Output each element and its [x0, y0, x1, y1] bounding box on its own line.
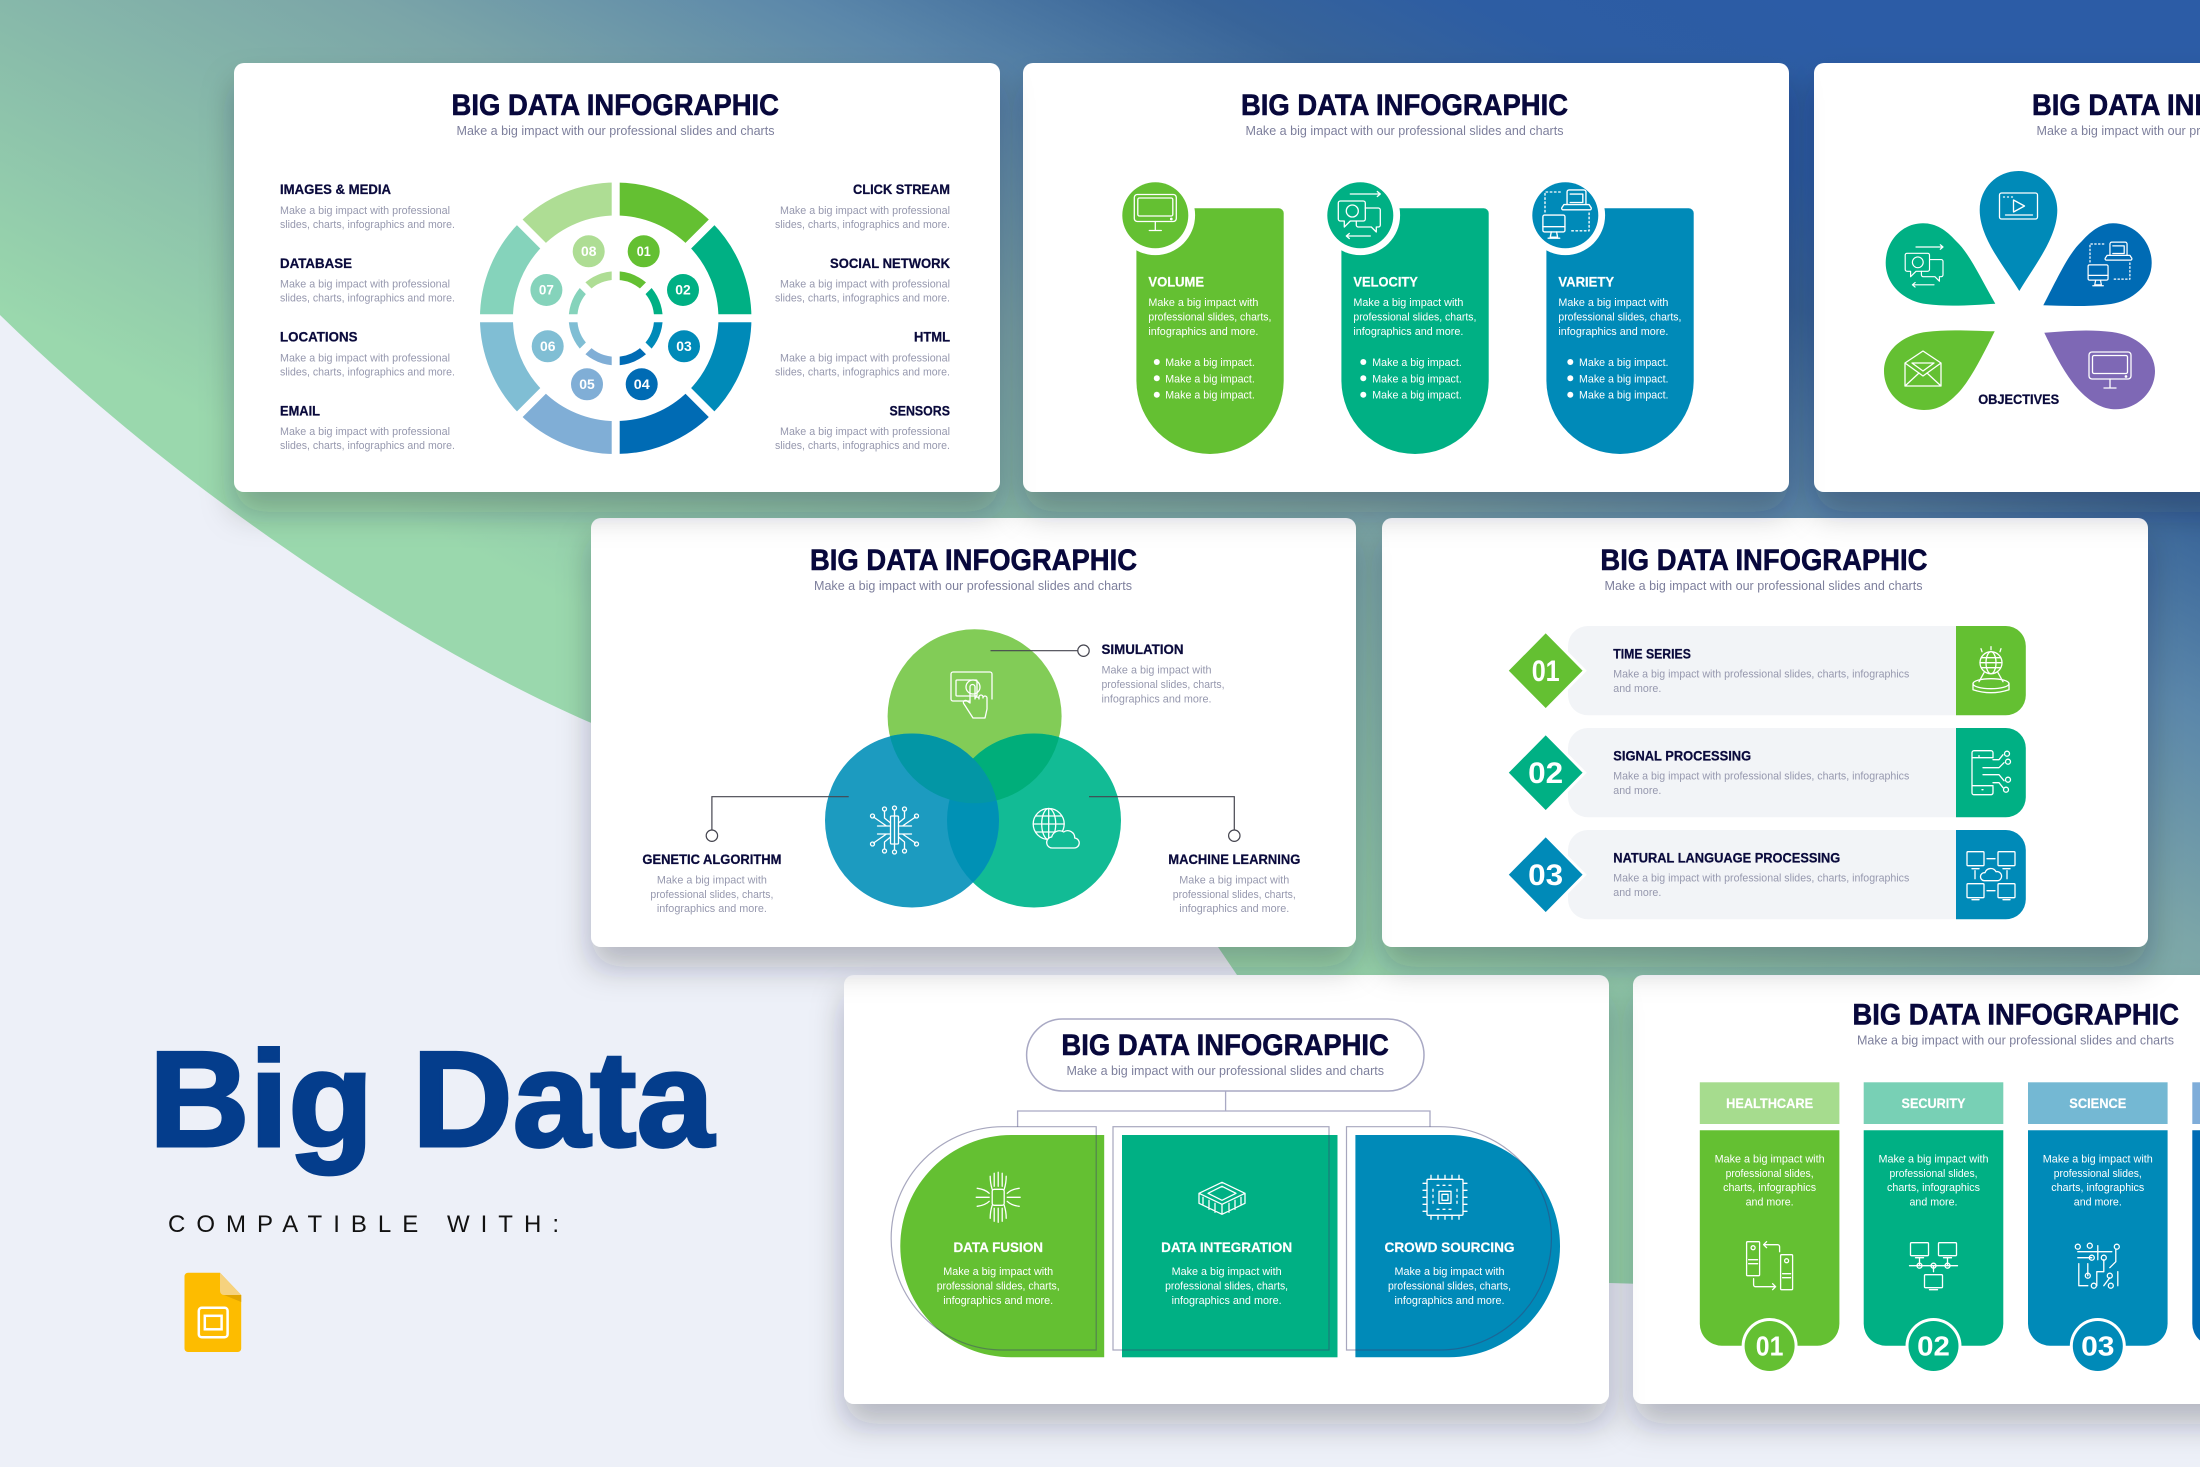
text: simulation: [1102, 642, 1224, 706]
card: velocity: Make a big impact.: [1372, 373, 1462, 385]
text: email: slides, charts, infographics and more.: [280, 440, 455, 452]
text: images and media: [280, 182, 455, 231]
text: machine learning: MACHINE LEARNING: [1168, 852, 1300, 867]
donut chart: 01: [637, 244, 651, 259]
card: velocity: Make a big impact.: [1372, 390, 1462, 402]
row 1 time series: Make a big impact with professional slides, charts, infographics: [1613, 668, 1910, 680]
row 3 natural language processing: 03: [1528, 859, 1563, 892]
text: social network: SOCIAL NETWORK: [830, 256, 950, 271]
column 3 science: charts, infographics: [2051, 1182, 2145, 1194]
donut chart: 04: [634, 377, 650, 392]
column 3 science: 03: [2081, 1331, 2114, 1362]
card: variety: Make a big impact.: [1579, 357, 1668, 369]
heading: BIG DATA INFOGRAPHIC: [452, 89, 779, 122]
text: machine learning: [1168, 852, 1300, 915]
panel: data integration: infographics and more.: [1172, 1295, 1282, 1307]
column 3 science: Make a big impact with: [2043, 1154, 2153, 1166]
column 1 healthcare: Make a big impact with: [1715, 1154, 1825, 1166]
column 1 healthcare: professional slides,: [1726, 1168, 1814, 1180]
text: sensors: SENSORS: [890, 404, 950, 418]
text: click stream: CLICK STREAM: [853, 182, 950, 197]
text: html: Make a big impact with professional: [780, 352, 950, 364]
column 3 science: professional slides,: [2054, 1168, 2142, 1180]
row 1 time series: [1507, 626, 2026, 715]
row 2 signal processing: [1507, 728, 2026, 817]
petal: monitor: [2044, 330, 2155, 409]
donut chart: 06: [540, 339, 556, 354]
text: sensors: Make a big impact with professional: [780, 426, 950, 438]
text: database: Make a big impact with professional: [280, 279, 450, 291]
panel: data integration: [1113, 1127, 1338, 1357]
donut chart: 08: [581, 244, 597, 259]
column 3 science: [2028, 1082, 2168, 1374]
text: genetic algorithm: professional slides, charts,: [650, 889, 773, 901]
slide 1: donut diagram: [234, 63, 1000, 492]
column 1 healthcare: and more.: [1746, 1196, 1794, 1208]
column 2 security: 02: [1917, 1331, 1950, 1362]
text: genetic algorithm: GENETIC ALGORITHM: [642, 852, 781, 867]
label: objectives: OBJECTIVES: [1978, 392, 2059, 407]
line: simulation: [990, 645, 1089, 656]
column 2 security: [1864, 1082, 2003, 1374]
donut chart: 03: [676, 339, 692, 354]
text: database: DATABASE: [280, 256, 352, 271]
petal: devices: [2043, 223, 2152, 306]
row 1 time series: 01: [1532, 655, 1560, 688]
card: volume: Make a big impact with: [1148, 297, 1258, 309]
text: html: HTML: [914, 330, 950, 344]
panel: data fusion: professional slides, charts,: [937, 1280, 1060, 1292]
text: locations: LOCATIONS: [280, 330, 358, 344]
card: volume: Make a big impact.: [1165, 390, 1255, 402]
heading: BIG DATA INFOGRAPHIC: [810, 544, 1137, 577]
icon: touch screen: [951, 672, 992, 718]
text: simulation: Make a big impact with: [1102, 664, 1212, 676]
row 2 signal processing: and more.: [1613, 785, 1661, 797]
text: simulation: professional slides, charts,: [1102, 679, 1224, 691]
icon: genetic algorithm: [870, 806, 918, 854]
panel: data integration: DATA INTEGRATION: [1161, 1239, 1292, 1255]
panel: crowd sourcing: infographics and more.: [1394, 1295, 1504, 1307]
text: locations: [280, 330, 455, 378]
line: machine learning: [1089, 797, 1240, 841]
text: html: slides, charts, infographics and more.: [775, 366, 950, 378]
card: velocity: VELOCITY: [1353, 274, 1419, 290]
text: locations: slides, charts, infographics and more.: [280, 366, 455, 378]
row 2 signal processing: Make a big impact with professional slides, charts, infographics: [1613, 770, 1910, 782]
panel: data integration: professional slides, charts,: [1165, 1280, 1288, 1292]
petal: email: [1884, 330, 1995, 410]
text: simulation: SIMULATION: [1102, 642, 1184, 657]
subheading: Make a big impact with our professional slides and charts: [1246, 123, 1564, 138]
column 1 healthcare: HEALTHCARE: [1726, 1095, 1813, 1111]
slide 4: venn diagram: [591, 518, 1356, 947]
text: sensors: [775, 404, 950, 452]
row 3 natural language processing: [1507, 830, 2026, 919]
donut chart: 05: [579, 377, 595, 392]
column 3 science: SCIENCE: [2069, 1095, 2126, 1111]
text: sensors: slides, charts, infographics and more.: [775, 440, 950, 452]
text: locations: Make a big impact with professional: [280, 352, 450, 364]
card: velocity: professional slides, charts,: [1353, 312, 1476, 324]
card: variety: Make a big impact with: [1558, 297, 1668, 309]
petal: video: [1980, 171, 2057, 291]
text: images and media: IMAGES & MEDIA: [280, 182, 391, 197]
subheading: Make a big impact with our professional slides and charts: [1604, 578, 1923, 593]
column 1 healthcare: charts, infographics: [1723, 1182, 1817, 1194]
text: simulation: infographics and more.: [1102, 694, 1212, 706]
column 2 security: SECURITY: [1902, 1095, 1966, 1111]
heading: BIG DATA INFOGRAPHIC: [1600, 544, 1927, 577]
panel: crowd sourcing: professional slides, charts,: [1388, 1280, 1511, 1292]
row 1 time series: and more.: [1613, 683, 1661, 695]
card: variety: VARIETY: [1558, 274, 1615, 290]
slide 6: three part tree: [844, 975, 1609, 1404]
big title: Big Data: [149, 1023, 715, 1175]
text: database: slides, charts, infographics and more.: [280, 293, 455, 305]
column 2 security: charts, infographics: [1887, 1182, 1980, 1194]
card: velocity: Make a big impact with: [1353, 297, 1463, 309]
text: email: Make a big impact with professional: [280, 426, 450, 438]
text: social network: slides, charts, infographics and more.: [775, 293, 950, 305]
donut chart: 07: [539, 283, 554, 298]
text: machine learning: infographics and more.: [1179, 903, 1289, 915]
text: social network: [775, 256, 950, 305]
card: volume: VOLUME: [1148, 274, 1204, 290]
panel: crowd sourcing: CROWD SOURCING: [1384, 1239, 1515, 1255]
card: velocity: Make a big impact.: [1372, 357, 1462, 369]
venn circles: [825, 629, 1121, 908]
text: machine learning: professional slides, charts,: [1173, 889, 1296, 901]
card: volume: infographics and more.: [1148, 326, 1258, 338]
column 2 security: professional slides,: [1890, 1168, 1978, 1180]
icon: google slides: [184, 1273, 241, 1352]
text: email: [280, 404, 455, 452]
panel: data integration: Make a big impact with: [1172, 1266, 1282, 1278]
title pill: [1027, 1019, 1424, 1091]
row 2 signal processing: SIGNAL PROCESSING: [1613, 748, 1751, 764]
row 2 signal processing: 02: [1528, 757, 1563, 790]
column 2 security: and more.: [1910, 1196, 1958, 1208]
donut chart: 02: [675, 283, 691, 298]
text: images and media: Make a big impact with professional: [280, 205, 450, 217]
card: velocity: infographics and more.: [1353, 326, 1463, 338]
donut chart: [447, 150, 784, 487]
text: click stream: slides, charts, infographics and more.: [775, 219, 950, 231]
panel: data fusion: infographics and more.: [943, 1295, 1053, 1307]
card: volume: [1116, 176, 1284, 454]
card: variety: Make a big impact.: [1579, 373, 1668, 385]
slide 5: numbered rows: [1382, 518, 2148, 947]
slide 7: columns: [1633, 975, 2200, 1404]
subheading: Make a big impact with our professional slides and charts: [814, 578, 1132, 593]
panel: data fusion: Make a big impact with: [943, 1266, 1053, 1278]
icon: globe with cloud: [1033, 808, 1079, 848]
text: genetic algorithm: infographics and more.: [657, 903, 767, 915]
card: volume: Make a big impact.: [1165, 373, 1255, 385]
slide 3: objectives petals: [1814, 63, 2200, 492]
row 3 natural language processing: NATURAL LANGUAGE PROCESSING: [1613, 850, 1840, 866]
text: images and media: slides, charts, infographics and more.: [280, 219, 455, 231]
row 3 natural language processing: Make a big impact with professional slides, charts, infographics: [1613, 872, 1910, 884]
subheading: Make a big impact with our professional slides and charts: [1857, 1032, 2174, 1048]
slide 2: volume velocity variety: [1023, 63, 1789, 492]
text: click stream: [775, 182, 950, 231]
compatible with label: COMPATIBLE WITH:: [168, 1211, 559, 1238]
text: machine learning: Make a big impact with: [1179, 874, 1289, 886]
card: variety: Make a big impact.: [1579, 390, 1668, 402]
text: genetic algorithm: Make a big impact with: [657, 874, 767, 886]
row 3 natural language processing: and more.: [1613, 887, 1661, 899]
panel: crowd sourcing: [1346, 1127, 1560, 1357]
panel: data fusion: DATA FUSION: [953, 1239, 1043, 1255]
column 4 clipped: [2192, 1082, 2200, 1346]
column 1 healthcare: 01: [1756, 1331, 1783, 1362]
connector lines: [1018, 1091, 1430, 1127]
subheading: Make a big impact with our professional slides and charts: [1066, 1063, 1384, 1078]
heading: BIG DATA INFOGRAPHIC: [1061, 1029, 1389, 1062]
heading: BIG DATA INFOGRAPHIC: [1852, 998, 2179, 1032]
text: database: [280, 256, 455, 305]
card: volume: professional slides, charts,: [1148, 312, 1271, 324]
text: genetic algorithm: [642, 852, 781, 915]
card: variety: infographics and more.: [1558, 326, 1668, 338]
row 1 time series: TIME SERIES: [1613, 646, 1691, 662]
text: email: EMAIL: [280, 404, 320, 418]
text: social network: Make a big impact with professional: [780, 279, 950, 291]
text: click stream: Make a big impact with professional: [780, 205, 950, 217]
column 2 security: Make a big impact with: [1878, 1154, 1988, 1166]
line: genetic algorithm: [706, 797, 849, 841]
heading: BIG DATA INFOGRAPHIC: [1241, 89, 1568, 122]
panel: crowd sourcing: Make a big impact with: [1394, 1266, 1504, 1278]
text: html: [775, 330, 950, 378]
panel: data fusion: [891, 1127, 1104, 1357]
subheading: Make a big impact with our professional slides and charts: [456, 123, 775, 138]
card: velocity: [1320, 176, 1489, 454]
card: volume: Make a big impact.: [1165, 357, 1255, 369]
column 3 science: and more.: [2074, 1196, 2122, 1208]
column 1 healthcare: [1700, 1082, 1839, 1374]
card: variety: [1526, 176, 1694, 454]
petal: chat: [1886, 223, 1995, 306]
card: variety: professional slides, charts,: [1558, 312, 1681, 324]
